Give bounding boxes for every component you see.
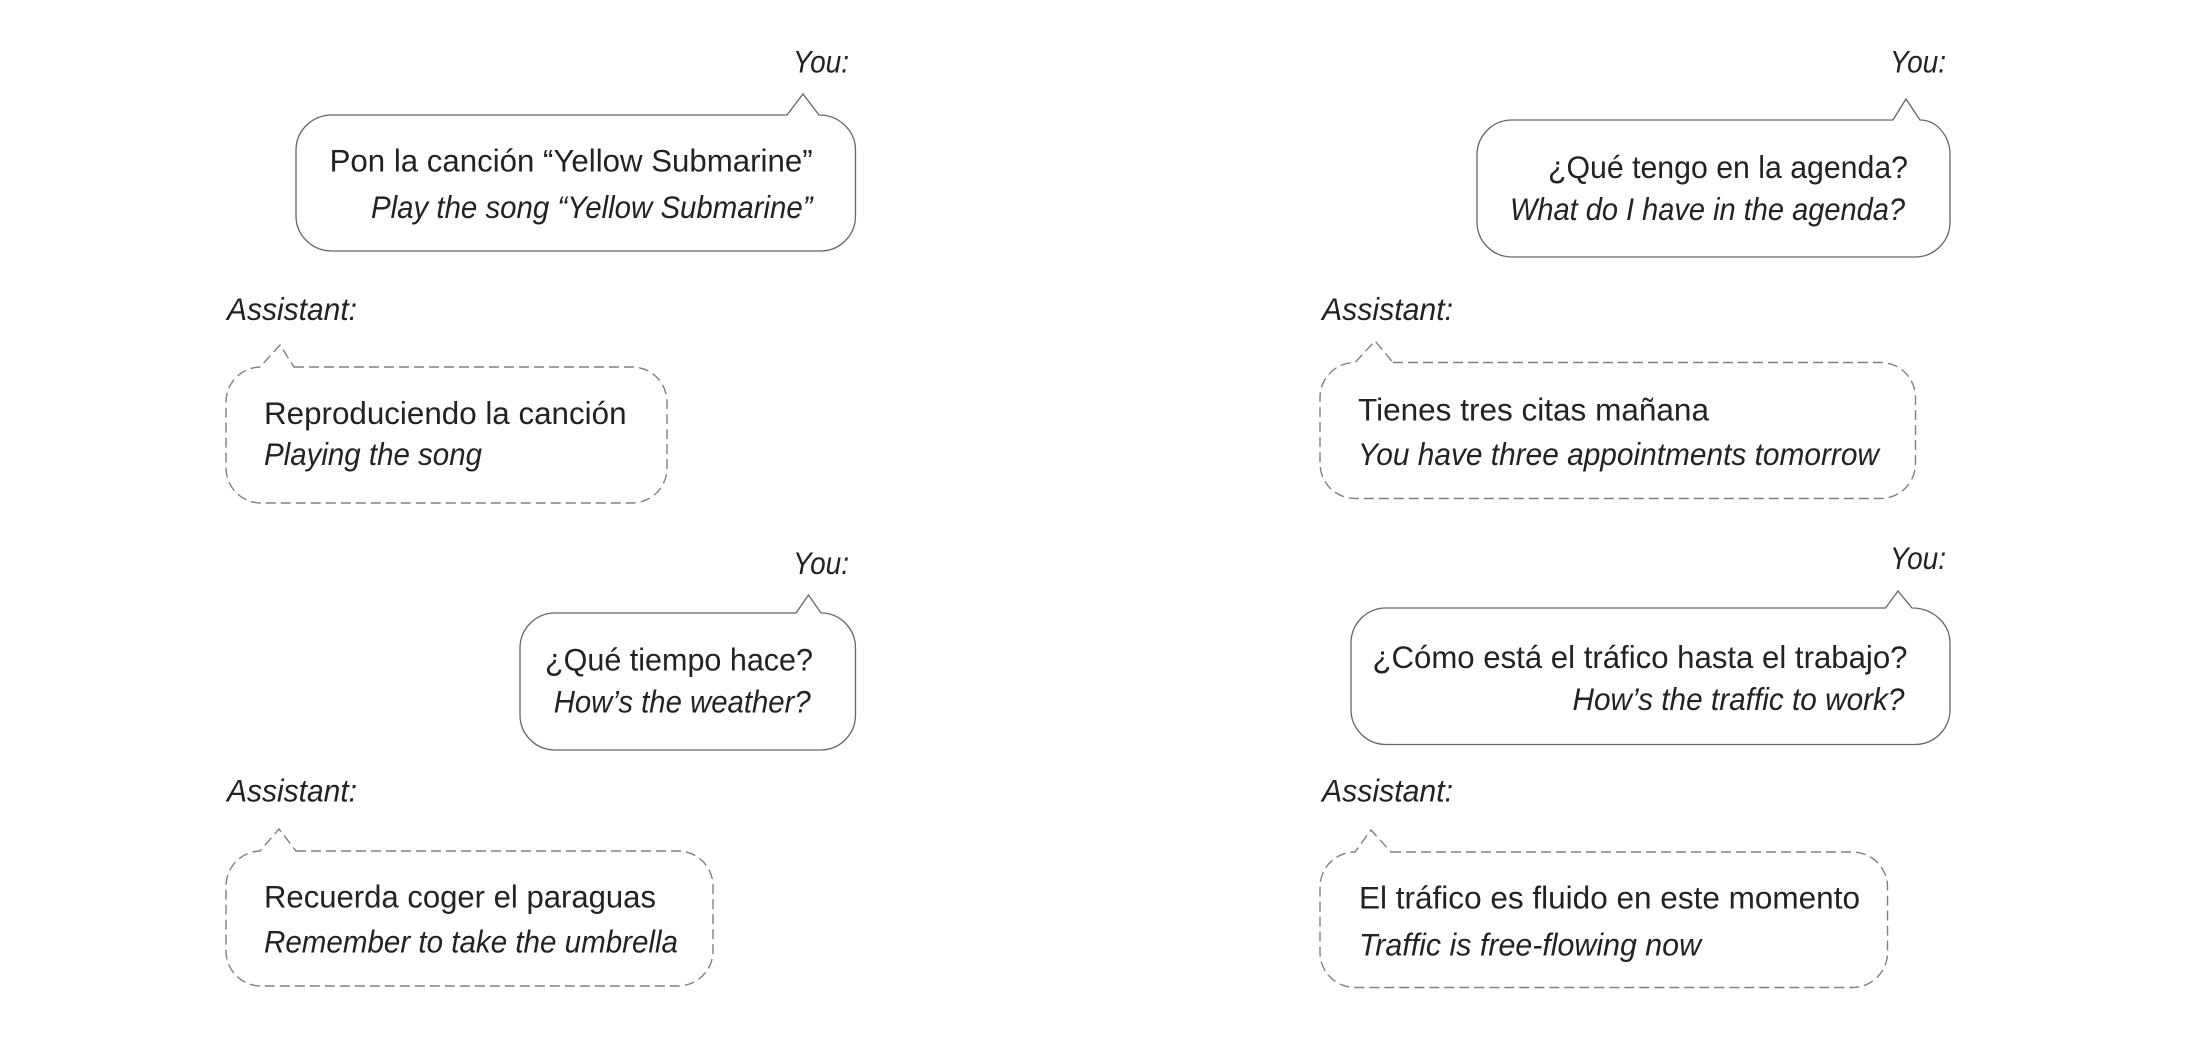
panel: top-left dialogue, play song <box>225 44 855 503</box>
assistant speech bubble: umbrella: Remember to take the umbrella <box>264 924 678 960</box>
label: Assistant: Assistant: <box>225 291 357 327</box>
user speech bubble: play song: Pon la canción “Yellow Submarine” <box>330 142 813 178</box>
assistant speech bubble: free-flowing traffic <box>1320 830 1888 988</box>
user speech bubble: agenda: ¿Qué tengo en la agenda? <box>1548 149 1908 185</box>
assistant speech bubble: playing song <box>226 345 667 503</box>
assistant speech bubble: free-flowing traffic: El tráfico es fluido en este momento <box>1359 880 1860 916</box>
label: You: You: <box>1890 44 1946 80</box>
panel: bottom-left dialogue, weather <box>225 545 855 986</box>
assistant speech bubble: playing song: Playing the song <box>264 436 482 472</box>
assistant speech bubble: free-flowing traffic: Traffic is free-flowing now <box>1359 926 1703 962</box>
user speech bubble: play song: Play the song “Yellow Submarine” <box>371 189 814 225</box>
label: You: You: <box>1890 540 1946 576</box>
user speech bubble: weather: ¿Qué tiempo hace? <box>545 642 813 678</box>
panel: bottom-right dialogue, traffic <box>1320 540 1950 988</box>
label: Assistant: Assistant: <box>1320 772 1453 808</box>
assistant speech bubble: umbrella: Recuerda coger el paraguas <box>264 878 656 914</box>
assistant speech bubble: appointments: You have three appointments tomorrow <box>1358 436 1881 472</box>
assistant speech bubble: playing song: Reproduciendo la canción <box>264 395 626 431</box>
user speech bubble: agenda <box>1477 99 1950 257</box>
label: You: You: <box>793 44 849 80</box>
user speech bubble: traffic <box>1351 591 1950 744</box>
assistant speech bubble: appointments: Tienes tres citas mañana <box>1358 392 1709 428</box>
user speech bubble: agenda: What do I have in the agenda? <box>1510 191 1905 227</box>
assistant speech bubble: umbrella <box>226 829 713 986</box>
user speech bubble: weather: How’s the weather? <box>554 684 811 720</box>
assistant speech bubble: appointments <box>1320 341 1916 498</box>
panel: top-right dialogue, agenda <box>1320 44 1950 498</box>
user speech bubble: weather <box>520 595 856 750</box>
user speech bubble: traffic: ¿Cómo está el tráfico hasta el trabajo? <box>1372 639 1908 675</box>
label: Assistant: Assistant: <box>1320 291 1453 327</box>
label: Assistant: Assistant: <box>225 772 357 808</box>
user speech bubble: traffic: How’s the traffic to work? <box>1572 681 1905 717</box>
label: You: You: <box>793 545 849 581</box>
user speech bubble: play song <box>296 94 856 251</box>
